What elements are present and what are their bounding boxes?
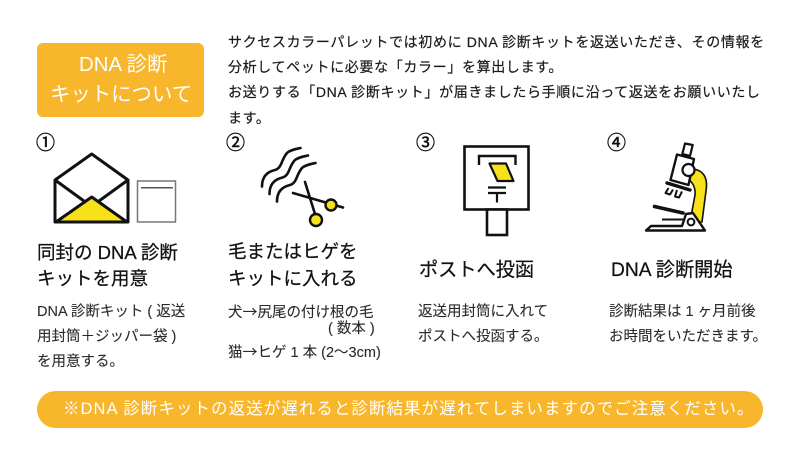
step 1 heading: 同封の DNA 診断 xyxy=(37,242,178,263)
icon: hair and scissors xyxy=(260,146,344,228)
notice banner: ※DNA 診断キットの返送が遅れると診断結果が遅れてしまいますのでご注意ください。 xyxy=(63,400,755,418)
step 2 number: ② xyxy=(226,133,245,154)
step 2 heading xyxy=(228,241,358,289)
badge: DNA 診断キットについて xyxy=(37,43,204,117)
step 2 description: ( 数本 ) xyxy=(328,321,375,337)
step 4 description: 診断結果は 1 ヶ月前後 xyxy=(609,304,756,320)
step 2 description: 猫→ヒゲ 1 本 (2〜3cm) xyxy=(228,341,381,362)
step 2 description: 犬→尻尾の付け根の毛 xyxy=(228,301,374,322)
step 1 description: DNA 診断キット ( 返送 xyxy=(37,304,185,320)
step 1 description xyxy=(37,303,185,370)
step 1 heading: キットを用意 xyxy=(37,268,148,289)
step 2 heading: 毛またはヒゲを xyxy=(228,241,358,262)
step 3 description xyxy=(418,303,548,345)
intro text: 分析してペットに必要な「カラー」を算出します。 xyxy=(228,59,563,75)
icon: microscope xyxy=(644,142,708,232)
step 1 description: を用意する。 xyxy=(37,354,124,370)
step 1 description: 用封筒＋ジッパー袋 ) xyxy=(37,329,176,345)
step 3 heading: ポストへ投函 xyxy=(419,260,534,281)
step 4 heading: DNA 診断開始 xyxy=(611,260,733,281)
step 4 description xyxy=(609,303,767,345)
step 3 description: 返送用封筒に入れて xyxy=(418,304,548,320)
badge: DNA 診断キットについて: DNA 診断 xyxy=(79,54,167,76)
step 3 number: ③ xyxy=(416,133,435,154)
step 3 description: ポストへ投函する。 xyxy=(418,329,548,345)
notice banner xyxy=(37,391,763,428)
step 4 number: ④ xyxy=(607,133,626,154)
intro text: サクセスカラーパレットでは初めに DNA 診断キットを返送いただき、その情報を xyxy=(228,34,765,50)
step 2 description xyxy=(228,301,381,362)
step 1 heading xyxy=(37,242,178,289)
intro text: お送りする「DNA 診断キット」が届きましたら手順に沿って返送をお願いいたし xyxy=(228,84,761,100)
icon: open envelope and zip bag xyxy=(54,152,176,224)
step 1 number: ① xyxy=(36,133,55,154)
step 4 description: お時間をいただきます。 xyxy=(609,329,767,345)
badge: DNA 診断キットについて: キットについて xyxy=(50,84,192,106)
step 2 heading: キットに入れる xyxy=(228,268,358,289)
intro text xyxy=(228,34,765,126)
intro text: ます。 xyxy=(228,110,271,126)
icon: post box xyxy=(463,145,530,236)
